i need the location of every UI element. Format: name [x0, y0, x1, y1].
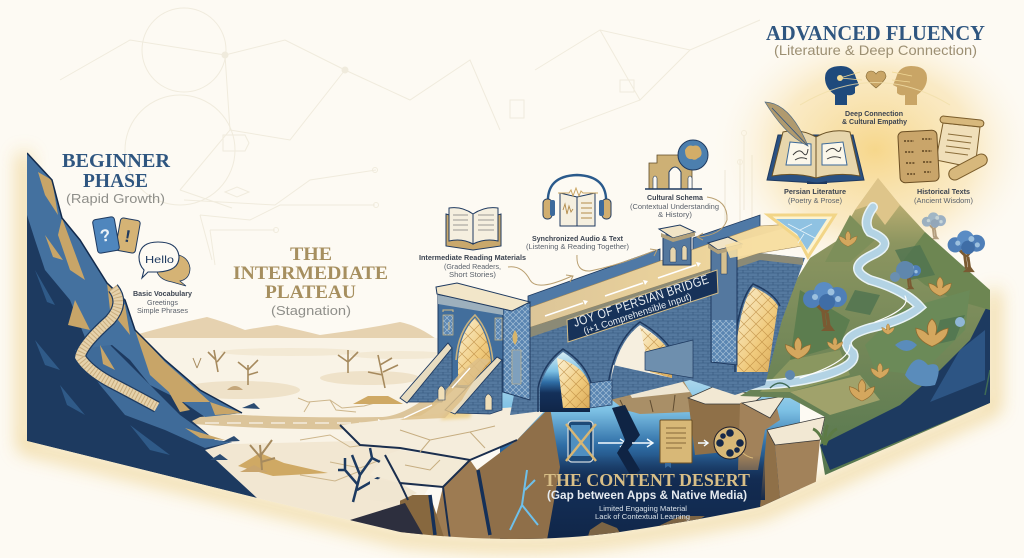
content desert notes [595, 504, 690, 521]
lush mountain [740, 178, 990, 475]
distant hills [140, 317, 434, 338]
tower T2 [708, 237, 742, 365]
basic vocabulary label: Basic Vocabulary [133, 289, 193, 298]
heading: advanced fluency: ADVANCED FLUENCY [766, 21, 985, 45]
plants on the mountain [770, 212, 990, 445]
beginner line 2: PHASE [83, 170, 148, 192]
beginner subtitle: (Rapid Growth) [66, 191, 165, 206]
dark dead tree [338, 448, 380, 502]
basic vocabulary label: Greetings [147, 298, 178, 307]
basic vocabulary label: Simple Phrases [137, 306, 188, 315]
label: cultural schema: (Contextual Understanding [630, 202, 719, 211]
heading: advanced fluency [766, 21, 985, 58]
icon: hello speech bubbles: Hello [145, 254, 174, 266]
arch 1 [538, 349, 592, 412]
outer gold glow [24, 153, 994, 545]
heading: the intermediate plateau: (Stagnation) [271, 303, 351, 318]
parapet [528, 249, 660, 310]
plateau desert floor [144, 338, 438, 520]
bridge [400, 215, 835, 420]
label: persian literature: Persian Literature [784, 187, 846, 196]
faint network decoration [60, 8, 760, 265]
label: intermediate reading materials: Short Stories) [449, 270, 497, 279]
icon: headphones and synchronized text [543, 175, 611, 226]
label: historical texts: Historical Texts [917, 187, 970, 196]
label: cultural schema [630, 193, 719, 219]
label: deep connection: Deep Connection [845, 109, 903, 118]
label: deep connection [842, 109, 908, 126]
icon: open reading book [446, 208, 501, 250]
label: synchronized audio and text: Synchronized Audio & Text [532, 234, 623, 243]
icon: connected heads and heart [800, 66, 950, 105]
deck arrows [545, 265, 696, 316]
label: historical texts [914, 187, 973, 205]
banner text [571, 271, 714, 339]
icon: hello speech bubbles [139, 242, 190, 286]
heading: the intermediate plateau [233, 244, 388, 318]
connector arrows [508, 197, 727, 285]
gap icons: phone to media [566, 405, 753, 478]
label: intermediate reading materials [419, 253, 526, 279]
scene [27, 153, 990, 540]
heading: content desert [544, 470, 750, 521]
banner [567, 270, 718, 342]
foreground cracked slabs and cliffs [340, 405, 705, 540]
heading: the intermediate plateau: INTERMEDIATE [233, 263, 388, 284]
icon: tablet and scrolls [898, 116, 989, 183]
halo behind advanced fluency [710, 15, 1024, 285]
arrow [598, 439, 626, 447]
icon: question and exclamation cards: ! [123, 227, 132, 246]
label: intermediate reading materials: (Graded Readers, [444, 262, 501, 271]
arrow [632, 439, 653, 447]
arch 3 [735, 284, 780, 372]
left tower [436, 283, 530, 400]
banner subtitle: (i+1 Comprehensible Input) [582, 291, 693, 337]
label: cultural schema: & History) [658, 210, 693, 219]
dry trees [193, 350, 398, 470]
chasm gap [500, 380, 800, 539]
basic vocabulary label [133, 289, 193, 315]
icon: manuscript [660, 420, 692, 468]
river [747, 207, 920, 385]
icon: crossed out phone [566, 421, 596, 462]
icon: cultural building and brain [645, 140, 708, 189]
crack [612, 405, 640, 478]
content desert notes: Lack of Contextual Learning [595, 512, 690, 521]
arrow [698, 440, 708, 446]
icon: film reel [714, 427, 753, 459]
label: synchronized audio and text: (Listening & Reading Together) [526, 242, 629, 251]
rear chasm cliffs [560, 382, 825, 507]
road across plateau [192, 387, 456, 430]
heading: the intermediate plateau: THE [290, 244, 332, 265]
label: cultural schema: Cultural Schema [647, 193, 704, 202]
icon: question and exclamation cards: ? [99, 225, 112, 246]
label: historical texts: (Ancient Wisdom) [914, 196, 973, 205]
label: synchronized audio and text [526, 234, 629, 251]
label: persian literature [784, 187, 846, 205]
deck [528, 224, 802, 328]
label: deep connection: & Cultural Empathy [842, 117, 908, 126]
arch 2 [608, 322, 674, 385]
ramps [400, 343, 502, 420]
bridge wall with arches [510, 253, 805, 415]
icon: question and exclamation cards [92, 216, 141, 254]
heading: the intermediate plateau: PLATEAU [265, 282, 356, 303]
label: intermediate reading materials: Intermediate Reading Materials [419, 253, 526, 262]
banner title: JOY OF PERSIAN BRIDGE [571, 271, 711, 330]
content desert notes: Limited Engaging Material [599, 504, 687, 513]
label: persian literature: (Poetry & Prose) [788, 196, 842, 205]
big arrow [725, 215, 835, 258]
heading: beginner phase [62, 150, 171, 206]
left cliff [27, 153, 260, 498]
heading: advanced fluency: (Literature & Deep Connection) [774, 42, 977, 58]
icon: persian literature book and quill [765, 102, 864, 184]
content desert title: THE CONTENT DESERT [544, 470, 750, 490]
content desert subtitle: (Gap between Apps & Native Media) [547, 490, 747, 502]
tower T1 [659, 225, 695, 265]
beginner line 1: BEGINNER [62, 150, 171, 172]
